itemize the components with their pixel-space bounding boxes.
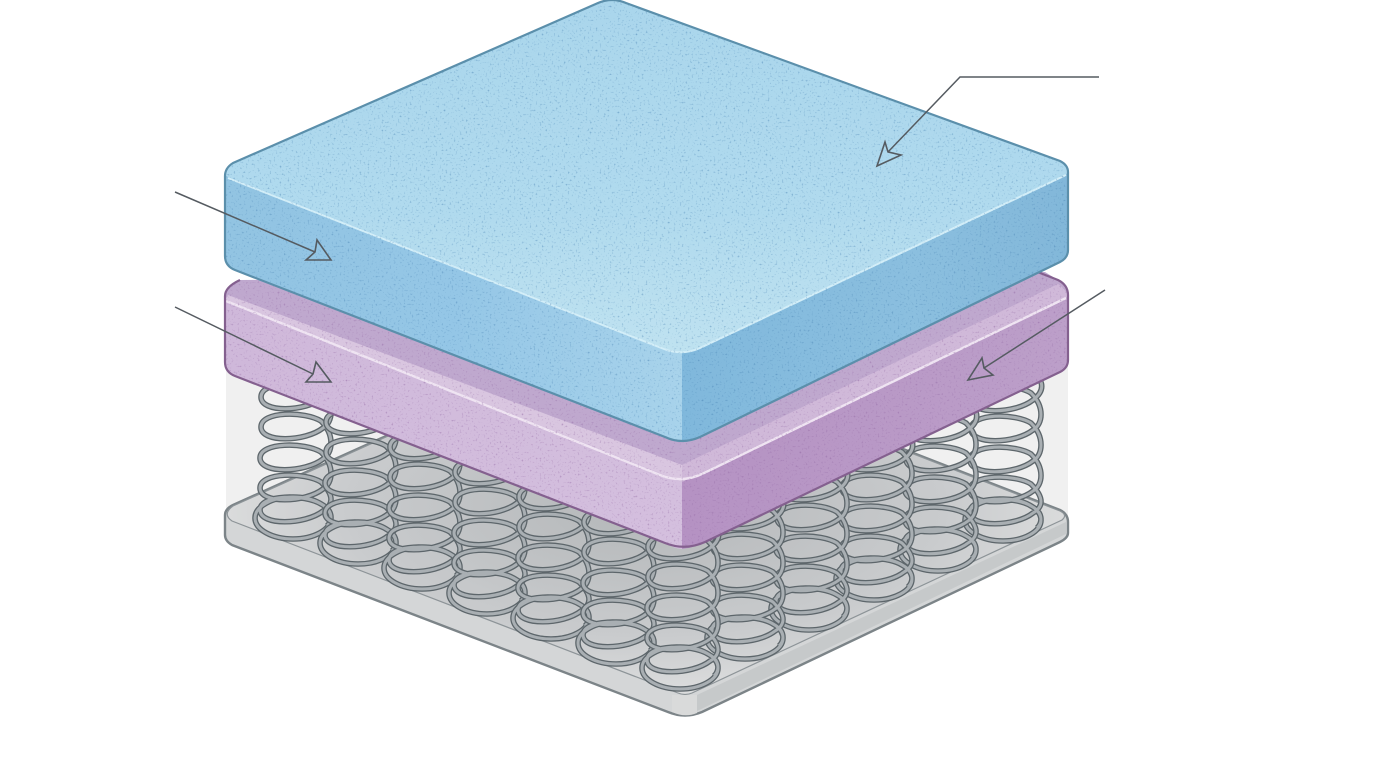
blue speckle	[225, 0, 1068, 441]
blue left face	[225, 172, 682, 442]
plate right face shade	[697, 522, 1066, 711]
base plate	[225, 335, 1068, 716]
translucent side wall behind springs	[226, 360, 1068, 525]
purple crease highlight	[226, 298, 1066, 479]
purple comfort layer	[225, 271, 1068, 549]
arrow: top right callout	[877, 77, 1099, 166]
blue crease highlight	[228, 175, 1066, 352]
plate front corner	[672, 695, 697, 715]
blue top face	[226, 0, 1067, 352]
plate top surface	[227, 336, 1065, 694]
blue right face	[682, 172, 1068, 442]
arrow: lower right callout	[968, 290, 1105, 380]
springs grid	[255, 380, 1042, 689]
purple light band right	[682, 284, 1068, 482]
arrow: upper left callout	[175, 192, 331, 260]
purple light band left	[225, 295, 682, 482]
blue foam layer	[225, 0, 1068, 442]
purple outline	[225, 271, 1068, 547]
purple layer body	[225, 272, 1068, 547]
purple speckle	[225, 272, 1068, 547]
purple right face	[682, 297, 1068, 549]
arrow: lower left callout	[175, 307, 331, 382]
purple left face	[225, 300, 682, 549]
blue outline	[225, 0, 1068, 441]
